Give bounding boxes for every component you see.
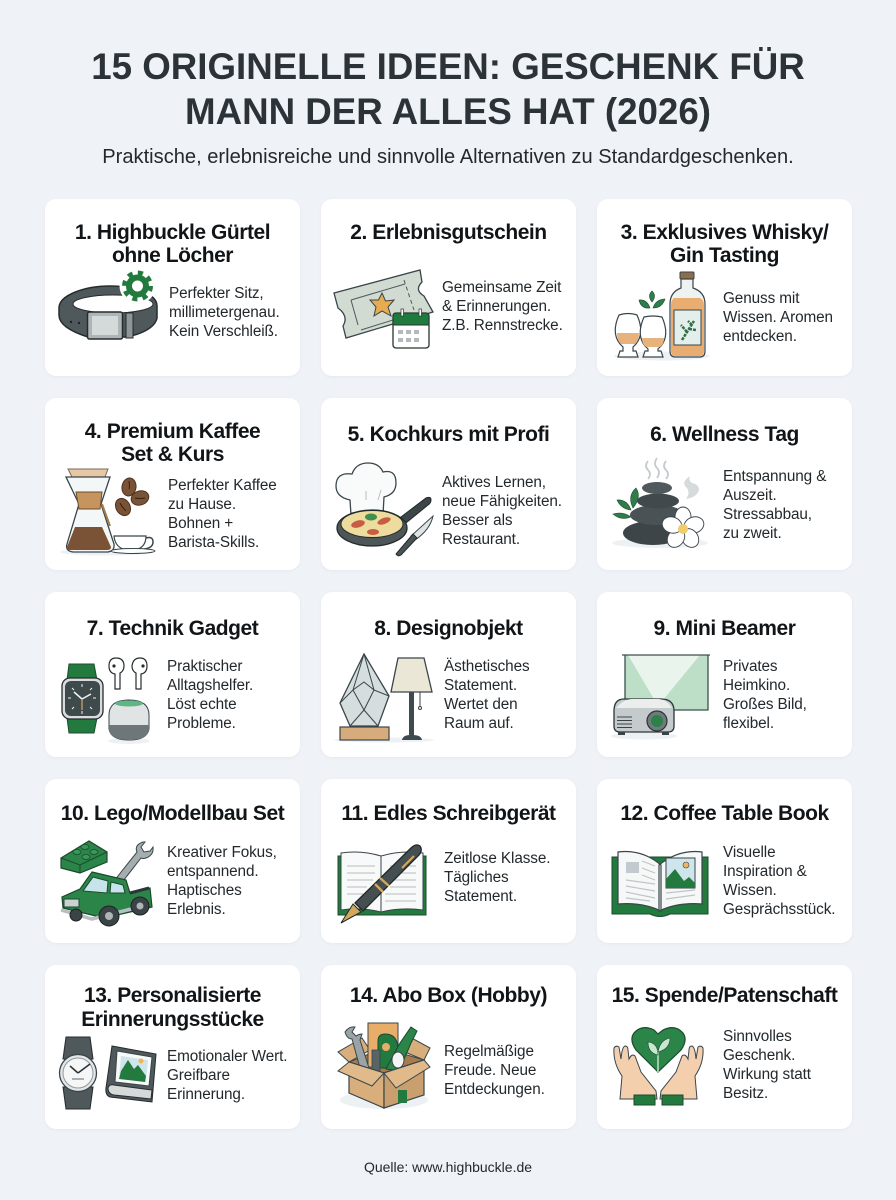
description: Haptisches: [167, 882, 242, 899]
description: Z.B. Rennstrecke.: [442, 317, 563, 334]
icon: crystal sculpture and lamp: [334, 652, 434, 742]
description: flexibel.: [723, 715, 774, 732]
panel: 12 Coffee Table Book: [597, 779, 852, 943]
description: Kein Verschleiß.: [169, 323, 278, 340]
icon: chemex, beans and cup: [60, 468, 156, 556]
panel: 13 Personalisierte Erinnerungsstücke: [45, 965, 300, 1129]
heading: [85, 420, 260, 466]
description: Geschenk.: [723, 1047, 795, 1064]
description: entdecken.: [723, 328, 797, 345]
heading: [81, 984, 264, 1030]
description: [169, 285, 280, 340]
description: [723, 1028, 811, 1102]
heading: ohne Löcher: [112, 244, 233, 267]
description: Zeitlose Klasse.: [444, 850, 550, 866]
description: Erlebnis.: [167, 901, 226, 918]
heading: 4. Premium Kaffee: [85, 420, 260, 442]
panel: 6 Wellness Tag: [597, 398, 852, 570]
description: Alltagshelfer.: [167, 677, 253, 694]
description: [167, 1048, 287, 1103]
description: Barista-Skills.: [168, 534, 259, 551]
heading: [75, 220, 270, 267]
panel: 7 Technik Gadget: [45, 592, 300, 757]
description: Sinnvolles: [723, 1028, 792, 1044]
heading: 2. Erlebnisgutschein: [350, 220, 547, 244]
description: [442, 278, 563, 334]
description: Genuss mit: [723, 290, 799, 306]
description: & Erinnerungen.: [442, 298, 551, 315]
description: Wissen.: [723, 882, 777, 899]
panel: 9 Mini Beamer: [597, 592, 852, 757]
heading: Erinnerungsstücke: [81, 1008, 264, 1030]
panel: 8 Designobjekt: [321, 592, 576, 757]
heading: 6. Wellness Tag: [650, 422, 799, 446]
description: Besitz.: [723, 1085, 768, 1102]
heading: 13. Personalisierte: [84, 984, 261, 1007]
icon: open book and fountain pen: [338, 844, 426, 924]
panel: 3 Whisky/Gin Tasting: [597, 199, 852, 376]
description: Raum auf.: [444, 715, 514, 732]
description: Tägliches: [444, 869, 509, 886]
panel: 14 Abo Box: [321, 965, 576, 1129]
description: [444, 658, 530, 732]
description: zu zweit.: [723, 525, 782, 542]
description: Statement.: [444, 888, 517, 905]
description: Probleme.: [167, 715, 236, 732]
description: Gesprächsstück.: [723, 901, 835, 918]
description: [167, 844, 277, 918]
description: [167, 658, 253, 732]
title: MANN DER ALLES HAT (2026): [185, 90, 711, 132]
description: Ästhetisches: [444, 658, 530, 674]
description: Perfekter Kaffee: [168, 476, 277, 494]
description: Großes Bild,: [723, 696, 807, 713]
description: [444, 850, 550, 905]
icon: projector and screen: [611, 654, 710, 740]
panel: 10 Lego/Modellbau: [45, 779, 300, 943]
icon: hot stones and flower: [612, 458, 708, 548]
description: Entdeckungen.: [444, 1081, 545, 1098]
heading: 8. Designobjekt: [374, 616, 523, 640]
icon: wristwatch and photo album: [58, 1036, 156, 1110]
description: Kreativer Fokus,: [167, 844, 277, 860]
description: [442, 474, 562, 548]
description: Auszeit.: [723, 487, 777, 504]
description: [723, 844, 835, 918]
panel: 5 Kochkurs: [321, 398, 576, 570]
heading: 15. Spende/Patenschaft: [612, 984, 837, 1007]
description: Bohnen +: [168, 515, 233, 532]
icon: belt with gear: [58, 270, 158, 340]
heading: 7. Technik Gadget: [87, 616, 258, 640]
icon: illustrated open book: [612, 850, 708, 917]
heading: Gin Tasting: [670, 244, 779, 267]
description: [168, 476, 277, 551]
description: Emotionaler Wert.: [167, 1048, 287, 1064]
description: [723, 290, 833, 345]
heading: 3. Exklusives Whisky/: [621, 220, 828, 244]
icon: open box with items: [337, 1022, 431, 1109]
description: Erinnerung.: [167, 1086, 245, 1103]
description: [444, 1042, 545, 1098]
description: zu Hause.: [168, 496, 236, 513]
heading: 10. Lego/Modellbau Set: [61, 802, 284, 825]
heading: 1. Highbuckle Gürtel: [75, 220, 270, 244]
description: Löst echte: [167, 696, 237, 713]
description: Greifbare: [167, 1067, 230, 1084]
icon: smartwatch, earbuds and speaker: [61, 657, 150, 744]
description: Gemeinsame Zeit: [442, 278, 561, 296]
description: [723, 468, 826, 542]
description: Aktives Lernen,: [442, 474, 546, 490]
description: Restaurant.: [442, 531, 520, 548]
heading: 11. Edles Schreibgerät: [341, 802, 556, 825]
description: Statement.: [444, 677, 517, 694]
description: Regelmäßige: [444, 1042, 534, 1060]
description: Besser als: [442, 512, 512, 529]
subtitle: Praktische, erlebnisreiche und sinnvolle Alternativen zu Standardgeschenken.: [102, 146, 794, 168]
panel: 15 Spende/Patenschaft: [597, 965, 852, 1129]
heading: 9. Mini Beamer: [654, 616, 795, 640]
description: Inspiration &: [723, 863, 807, 880]
title: 15 ORIGINELLE IDEEN: GESCHENK FÜR: [91, 46, 805, 87]
description: Visuelle: [723, 844, 776, 860]
description: Praktischer: [167, 658, 242, 674]
panel: 4 Premium Kaffee: [45, 398, 300, 570]
panel: 11 Edles Schreibgerät: [321, 779, 576, 943]
description: neue Fähigkeiten.: [442, 493, 562, 510]
panel: 1 Highbuckle Gürtel: [45, 199, 300, 376]
description: millimetergenau.: [169, 304, 280, 321]
description: Stressabbau,: [723, 506, 812, 523]
description: Privates: [723, 658, 777, 674]
heading: [621, 220, 829, 267]
icon: hands holding heart: [613, 1027, 704, 1106]
description: Perfekter Sitz,: [169, 285, 264, 302]
description: entspannend.: [167, 863, 259, 880]
heading: 14. Abo Box (Hobby): [350, 984, 547, 1007]
panel: 2 Erlebnisgutschein: [321, 199, 576, 376]
description: Wirkung statt: [723, 1066, 811, 1083]
icon: ticket and calendar: [333, 269, 434, 349]
heading: Set & Kurs: [121, 443, 224, 466]
description: [723, 658, 807, 732]
description: Wissen. Aromen: [723, 309, 833, 326]
description: Wertet den: [444, 696, 518, 713]
title: [91, 46, 805, 132]
heading: 12. Coffee Table Book: [620, 802, 829, 825]
description: Entspannung &: [723, 468, 826, 484]
heading: 5. Kochkurs mit Profi: [348, 422, 549, 446]
icon: bottle and tasting glasses: [614, 272, 710, 360]
description: Freude. Neue: [444, 1062, 536, 1079]
source line: Quelle: www.highbuckle.de: [364, 1159, 532, 1175]
icon: brick, wrench and truck: [60, 840, 154, 926]
description: Heimkino.: [723, 677, 790, 694]
icon: chef hat, pan and knife: [335, 462, 434, 556]
